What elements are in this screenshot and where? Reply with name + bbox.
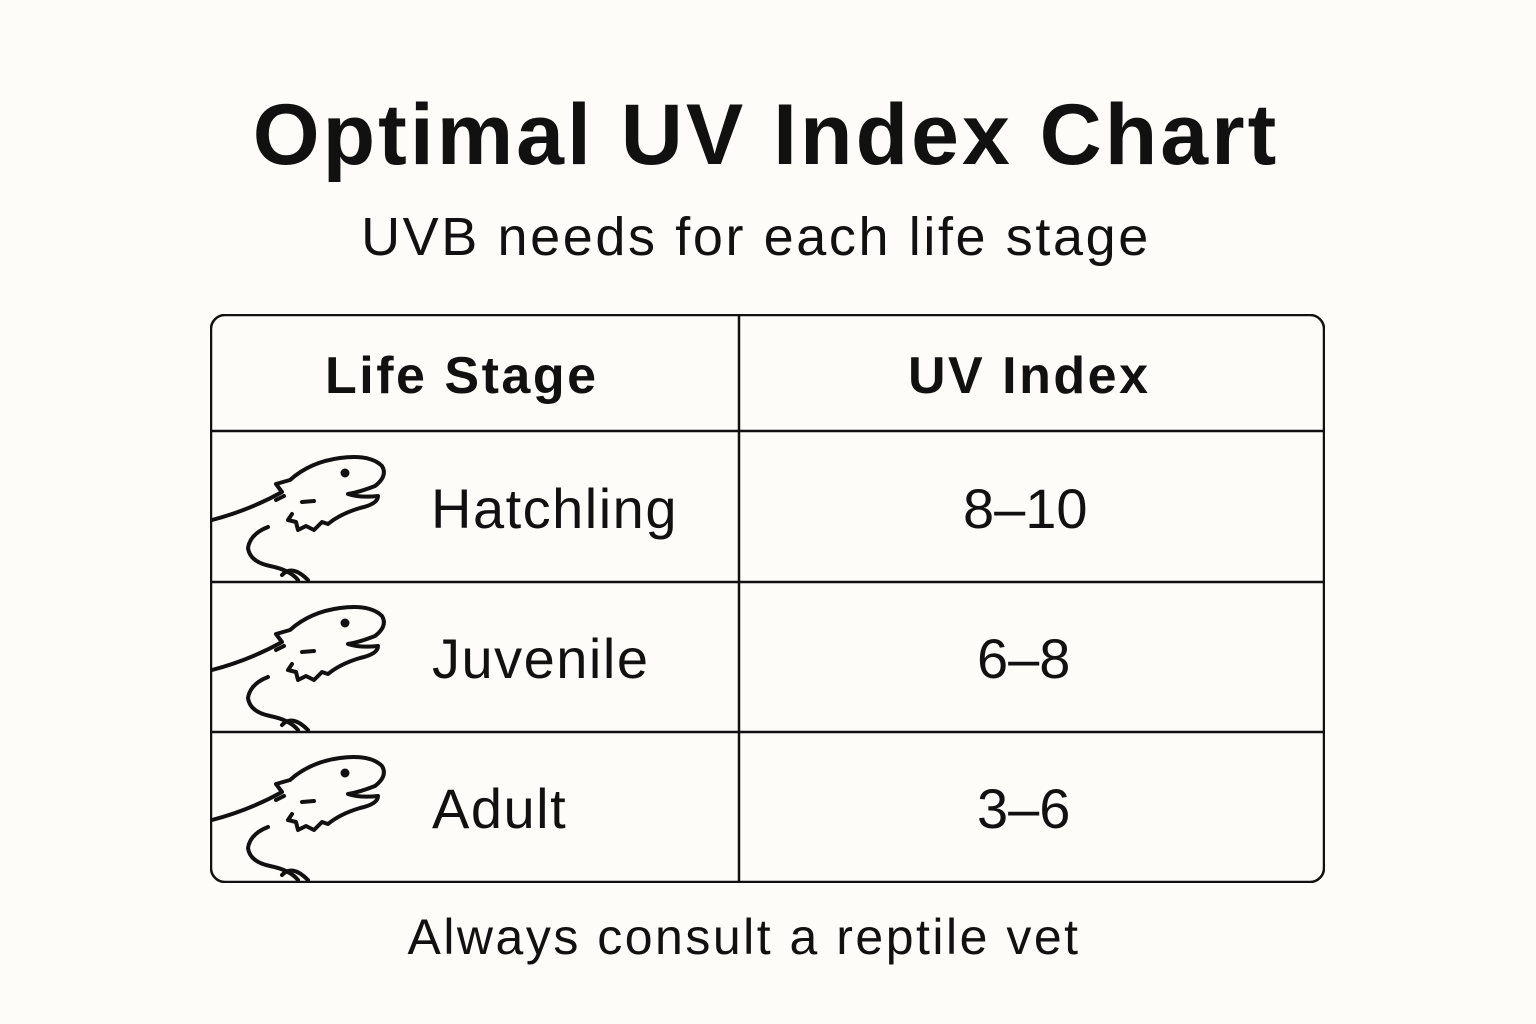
- row: juvenile: 6–8: [977, 627, 1070, 690]
- row: hatchling: [212, 455, 1088, 581]
- icon: lizard: [212, 455, 386, 581]
- row: hatchling: 8–10: [963, 477, 1088, 540]
- row: juvenile: [212, 605, 1070, 731]
- footer note: Always consult a reptile vet: [407, 909, 1081, 965]
- row: adult: 3–6: [977, 777, 1070, 840]
- row: adult: [212, 755, 1070, 881]
- icon: lizard: [212, 755, 386, 881]
- row: hatchling: Hatchling: [431, 477, 678, 540]
- row: juvenile: Juvenile: [432, 627, 649, 690]
- header: uv index: UV Index: [908, 347, 1150, 405]
- table: [210, 314, 1325, 883]
- icon: lizard: [212, 605, 386, 731]
- subtitle: UVB needs for each life stage: [361, 207, 1151, 267]
- row: adult: Adult: [432, 777, 567, 840]
- header: life stage: Life Stage: [325, 347, 598, 405]
- title: Optimal UV Index Chart: [253, 87, 1279, 183]
